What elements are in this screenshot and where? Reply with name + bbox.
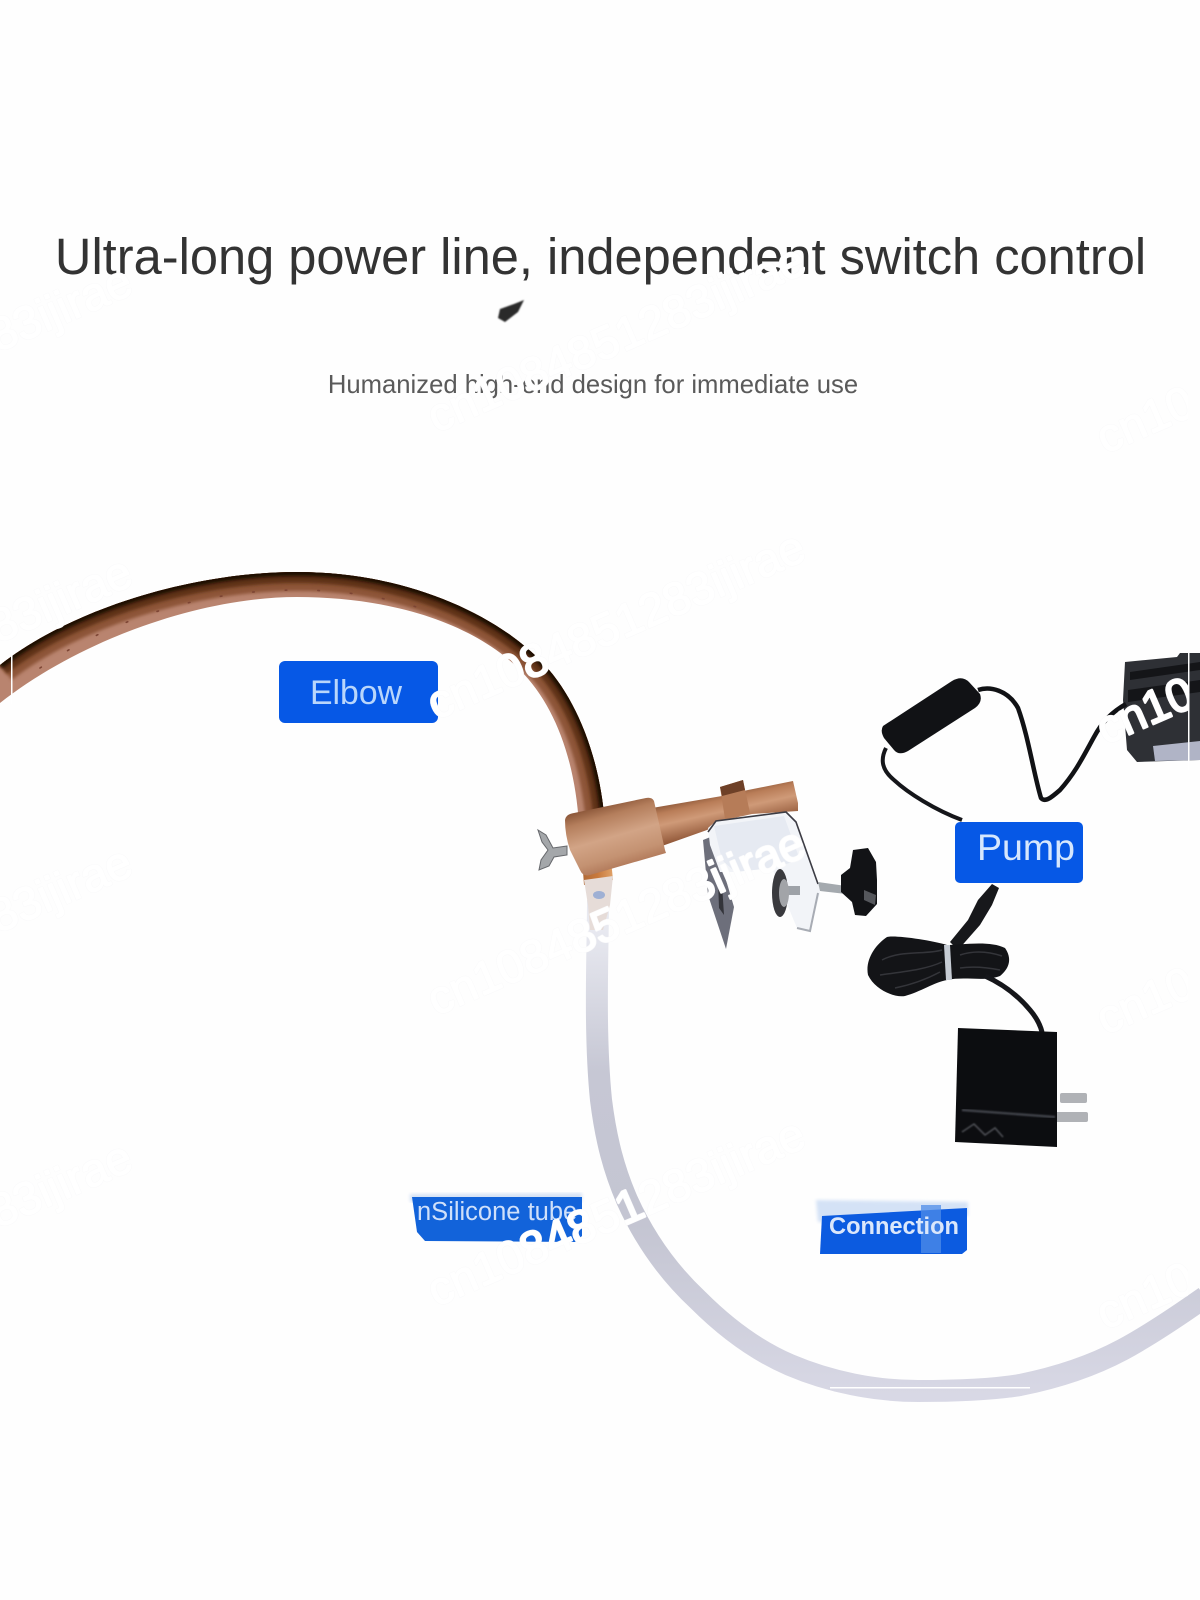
watermark outline layer: cn1084851283ijirae (419, 1107, 813, 1316)
connector label: Connection (829, 1213, 959, 1240)
watermark outline layer: cn1084851283ijirae (419, 520, 813, 729)
left jaw plate (703, 836, 734, 949)
tube nipple (582, 850, 613, 930)
copper arm and collar (652, 780, 798, 846)
watermark fill layer: cn1084851283ijirae (419, 520, 813, 729)
rocker switch (882, 678, 981, 753)
watermark fill layer: cn1084851283ijirae (419, 816, 813, 1025)
pipe spray holes (40, 590, 420, 668)
copper elbow pipe (0, 572, 604, 812)
wing nut (538, 830, 567, 870)
pump label (955, 822, 1083, 883)
watermark fill layer (432, 254, 1188, 1242)
adapter cable coil (867, 884, 1042, 1032)
stray white artifacts (11, 652, 1030, 1388)
subtitle: Humanized high-end design for immediate use (328, 371, 858, 399)
title: Ultra-long power line, independent switch control (55, 228, 1146, 285)
copper connector body (565, 798, 666, 875)
clamp bracket (703, 812, 820, 949)
silicone tube (597, 900, 1200, 1391)
watermark outline layer: cn1084851283ijirae (419, 233, 813, 442)
elbow label (279, 661, 438, 723)
watermark outline layer: cn1084851283ijirae (419, 816, 813, 1025)
power cable with switch (882, 678, 1126, 820)
residual dark fragment (498, 300, 524, 322)
white bracket (708, 812, 820, 931)
connector label (816, 1200, 968, 1254)
watermark fill layer: cn1084851283ijirae (419, 233, 813, 442)
elbow label: Elbow (310, 674, 403, 712)
pump label: Pump (977, 826, 1075, 868)
pump (1123, 650, 1200, 770)
silicone tube label: nSilicone tube (417, 1198, 577, 1226)
clamp screw and knob (772, 848, 877, 917)
power adapter (955, 1028, 1088, 1147)
watermark fill layer: cn1084851283ijirae (419, 1107, 813, 1316)
watermark outline layer (58, 252, 1188, 1296)
silicone tube label (410, 1193, 582, 1242)
